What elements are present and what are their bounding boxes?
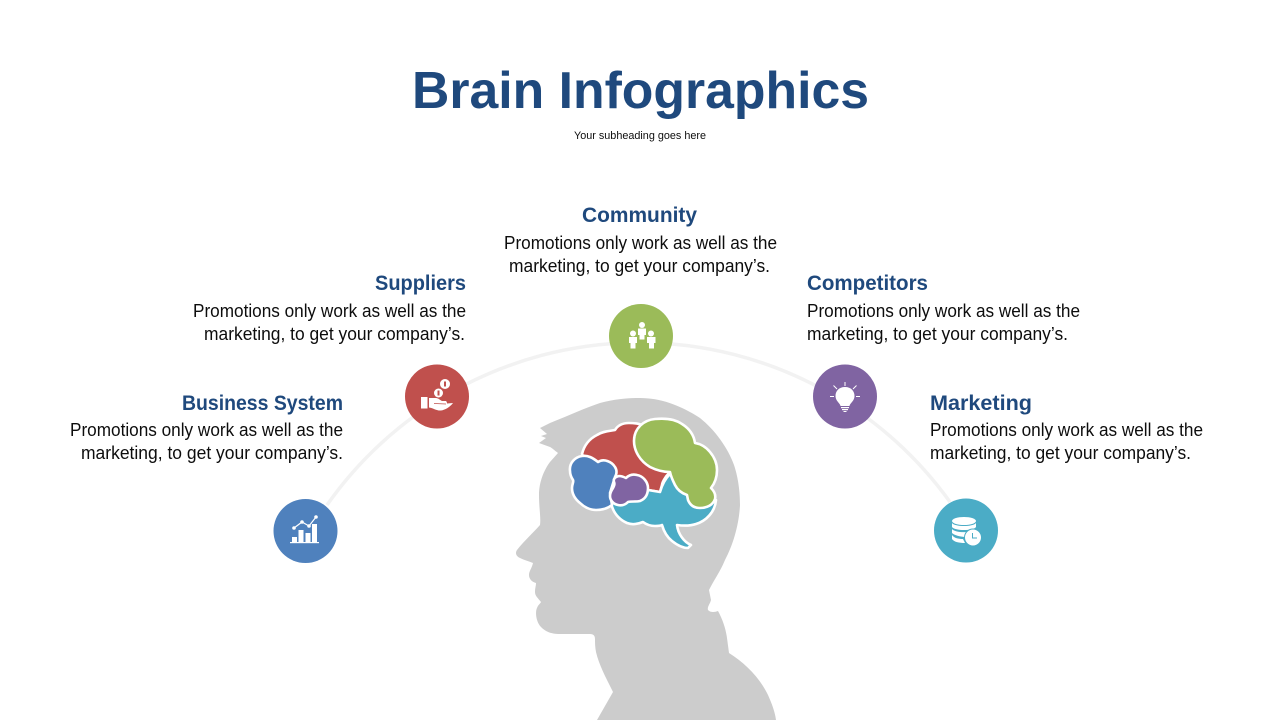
body: [70, 420, 343, 463]
circle: red: [405, 364, 469, 428]
brain: [570, 419, 717, 548]
heading: Marketing: [930, 392, 1032, 415]
body: [193, 301, 466, 344]
body: marketing, to get your company’s.: [81, 443, 343, 463]
head silhouette: [516, 398, 776, 720]
circle: teal: [934, 498, 998, 562]
circle: green: [609, 304, 673, 368]
body: Promotions only work as well as the: [193, 301, 466, 321]
icon: bar chart: [290, 515, 319, 543]
brain lobe: purple: [610, 475, 648, 505]
icon: database with clock: [952, 517, 982, 546]
heading: Competitors: [807, 272, 928, 295]
body: Promotions only work as well as the: [70, 420, 343, 440]
text: competitors: [807, 272, 1080, 344]
heading: Suppliers: [375, 272, 466, 295]
body: marketing, to get your company’s.: [930, 443, 1191, 463]
node: competitors: [813, 364, 877, 428]
brain lobe: red: [582, 423, 669, 492]
body: Promotions only work as well as the: [930, 420, 1203, 440]
circle: blue: [274, 499, 338, 563]
brain lobe: green: [634, 419, 717, 508]
node: community: [609, 304, 673, 368]
subheading: Your subheading goes here: [574, 130, 706, 142]
circle: purple: [813, 364, 877, 428]
body: [504, 233, 777, 276]
body: [807, 301, 1080, 344]
text: community: [504, 204, 777, 276]
brain lobe: teal: [611, 474, 716, 548]
body: [930, 420, 1203, 463]
body: Promotions only work as well as the: [807, 301, 1080, 321]
body: marketing, to get your company’s.: [509, 256, 770, 276]
title: Brain Infographics: [412, 62, 869, 120]
text: suppliers: [193, 272, 466, 344]
text: marketing: [930, 392, 1203, 463]
icon: people: [629, 322, 656, 348]
connecting arc: [327, 343, 950, 505]
body: marketing, to get your company’s.: [204, 324, 465, 344]
icon: hand with coins: [421, 379, 453, 411]
text: business system: [70, 392, 343, 463]
heading: Community: [582, 204, 697, 227]
body: Promotions only work as well as the: [504, 233, 777, 253]
node: suppliers: [405, 364, 469, 428]
body: marketing, to get your company’s.: [807, 324, 1068, 344]
brain lobe: blue: [570, 456, 616, 510]
icon: light bulb: [830, 382, 860, 412]
node: business system: [274, 499, 338, 563]
node: marketing: [934, 498, 998, 562]
heading: Business System: [182, 392, 343, 415]
